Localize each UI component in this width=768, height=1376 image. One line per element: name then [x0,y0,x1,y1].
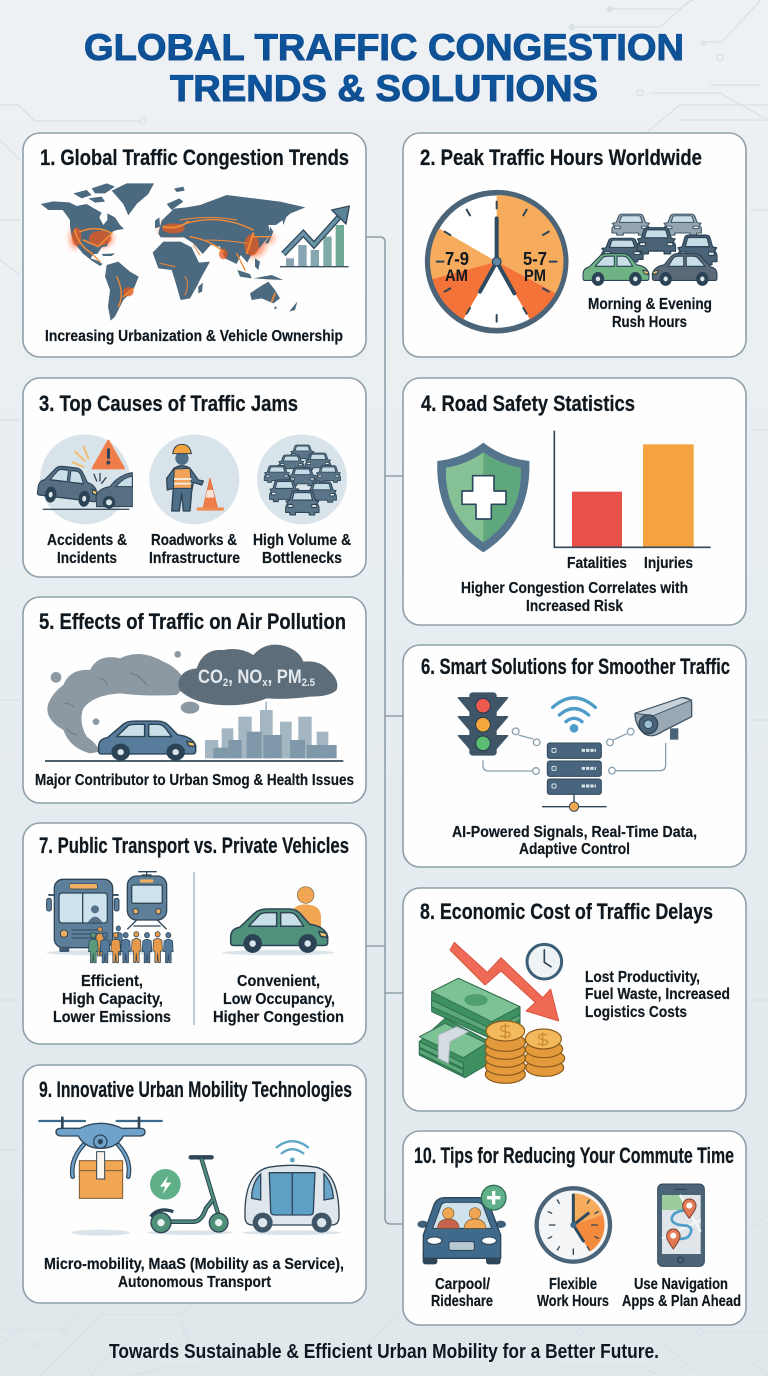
pollutants label: CO [198,667,226,688]
icon: cash stacks [419,978,520,1078]
pollutants label: 2.5 [302,677,315,689]
heading 9: 9. Innovative Urban Mobility Technologies [39,1077,352,1102]
caption 2 [588,296,712,331]
heading 1: 1. Global Traffic Congestion Trends [40,145,349,170]
comparison text [53,973,344,1026]
icon: road worker and cone [149,434,239,524]
pollutants label: 2 [223,677,228,689]
heading 4: 4. Road Safety Statistics [421,391,635,416]
icon: electric scooter [147,1157,233,1235]
caption 6: AI-Powered Signals, Real-Time Data, [452,824,697,841]
tip labels: Rideshare [431,1293,493,1310]
comparison text: Efficient, [81,973,143,990]
chart labels and caption: Increased Risk [526,598,623,615]
caption 6 [452,824,697,858]
icon: flexible hours clock [537,1188,610,1262]
panel: 2 peak traffic hours [403,133,746,357]
tip labels: Use Navigation [634,1276,728,1293]
pollutants label: , PM [268,667,302,688]
chart labels and caption: Higher Congestion Correlates with [461,580,688,597]
cause labels [47,532,351,567]
title: GLOBAL TRAFFIC CONGESTION [84,27,684,68]
pollutants label: , NO [228,667,262,688]
comparison text: Convenient, [237,973,320,990]
connector lines [366,237,403,1224]
caption 8: Logistics Costs [585,1004,687,1021]
world map with congestion hotspots [41,183,349,321]
comparison text: Lower Emissions [53,1009,171,1026]
icon: traffic jam of cars [583,214,717,285]
panel: 9 urban mobility technologies [23,1065,366,1303]
icon: coin stacks [485,1021,565,1083]
heading 3: 3. Top Causes of Traffic Jams [39,391,298,416]
chart labels and caption [461,555,693,615]
clock labels: 5-7 [523,249,547,269]
cause labels: Bottlenecks [262,550,342,567]
caption 8 [585,969,730,1021]
caption 2: Rush Hours [612,314,687,331]
panel: 5 effects on air pollution [23,597,366,803]
heading 7: 7. Public Transport vs. Private Vehicles [39,833,349,858]
comparison text: Low Occupancy, [223,991,335,1008]
cause labels: Accidents & [47,532,127,549]
caption 9: Micro-mobility, MaaS (Mobility as a Service), [44,1256,344,1273]
title [84,27,684,109]
chart labels and caption: Injuries [644,555,693,572]
tip labels: Carpool/ [435,1276,490,1293]
icon: delivery drone [39,1117,162,1236]
cause labels: Incidents [57,550,117,567]
title: TRENDS & SOLUTIONS [170,68,598,109]
caption 6: Adaptive Control [519,841,630,858]
footer tagline: Towards Sustainable & Efficient Urban Mobility for a Better Future. [109,1341,659,1363]
panel: 3 top causes of traffic jams [23,378,366,577]
tip labels [431,1276,741,1310]
pollutants label: x [262,677,268,689]
heading 2: 2. Peak Traffic Hours Worldwide [420,145,702,170]
comparison text: High Capacity, [62,991,163,1008]
cause labels: Roadworks & [151,532,237,549]
icon: traffic light [458,692,508,756]
icon: wifi [553,698,595,731]
panel: 8 economic cost [403,888,746,1111]
icon: clock [527,944,562,979]
network links [483,728,666,774]
panel: 10 commute tips [403,1131,746,1325]
caption 8: Lost Productivity, [585,969,700,986]
caption 8: Fuel Waste, Increased [585,986,730,1003]
clock labels: 7-9 [445,249,469,269]
diagram: connected traffic system [458,692,692,811]
icon: accident [36,434,132,524]
panel: 7 public vs private transport [23,823,366,1044]
clock labels: AM [445,266,468,285]
caption 5: Major Contributor to Urban Smog & Health Issues [35,772,354,789]
caption 1: Increasing Urbanization & Vehicle Ownership [45,328,343,345]
caption 2: Morning & Evening [588,296,712,313]
panel: 4 road safety statistics [403,378,746,625]
bar chart: fatalities vs injuries [554,431,711,547]
tip labels: Flexible [549,1276,597,1293]
caption 9 [44,1256,344,1291]
illustration: money, coins, falling arrow, clock [419,942,565,1083]
icon: carpool car [417,1185,506,1264]
illustration: smoke, car and skyline [45,645,343,761]
trend chart with arrow [280,206,349,267]
icon: falling arrow [450,942,559,1021]
tip labels: Work Hours [537,1293,609,1310]
cause labels: High Volume & [253,532,351,549]
icon: security camera [635,698,692,740]
icon: autonomous pod vehicle [242,1141,341,1235]
icon: server stack [542,743,607,811]
icon: safety shield [437,443,529,552]
clock labels: PM [524,266,546,285]
heading 5: 5. Effects of Traffic on Air Pollution [39,609,346,634]
panel: 1 global traffic congestion trends [23,133,366,357]
icon: navigation phone [658,1184,704,1266]
icon: bus, tram and commuters [47,871,173,963]
clock with rush hour wedges [428,193,566,331]
icon: private car and driver [222,887,334,955]
caption 9: Autonomous Transport [118,1274,272,1291]
tip labels: Apps & Plan Ahead [622,1293,741,1310]
panel: 6 smart solutions [403,645,746,867]
comparison text: Higher Congestion [213,1009,344,1026]
cause labels: Infrastructure [149,550,240,567]
clock labels [445,249,547,285]
icon: high volume cars [257,434,347,524]
chart labels and caption: Fatalities [567,555,627,572]
divider [193,872,195,1025]
